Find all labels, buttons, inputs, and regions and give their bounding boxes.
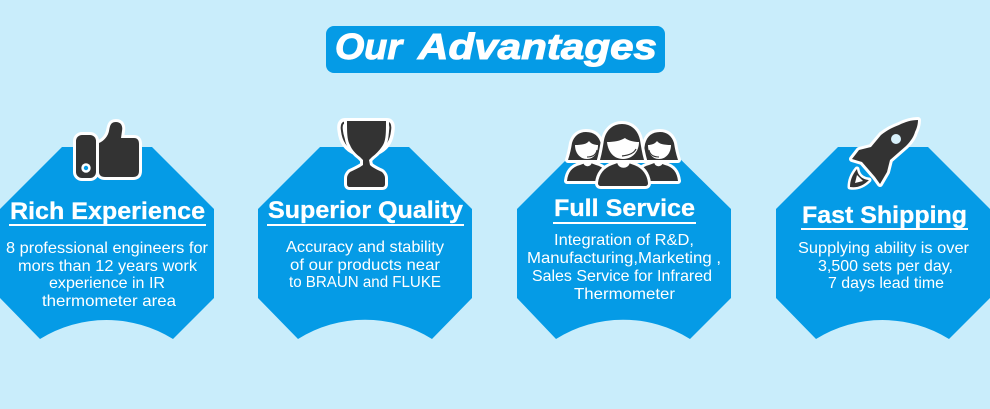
description: 3,500 sets per day, [818,258,953,275]
description: of our products near [290,257,441,274]
description: to BRAUN and FLUKE [289,274,441,291]
description: Accuracy and stability [286,239,444,256]
title: Advantages [417,26,657,67]
panel background [517,147,731,339]
description: thermometer area [42,293,176,310]
description: Sales Service for Infrared [532,268,712,285]
description: mors than 12 years work [18,258,198,275]
icon: support team [567,124,678,186]
panel background [258,147,472,339]
description: Supplying ability is over [798,240,970,257]
icon: rocket [850,120,918,187]
description: Manufacturing,Marketing , [527,250,721,267]
heading: Fast Shipping [802,202,967,229]
description: experience in IR [49,275,165,292]
description: Integration of R&D, [554,232,694,249]
description: Thermometer [574,286,676,303]
panel background [776,147,990,339]
title: Our [335,26,404,67]
heading: Superior Quality [268,197,463,224]
icon: thumbs up [76,122,139,178]
left agent [567,132,609,181]
description [527,232,721,303]
description: 7 days lead time [828,275,944,292]
panel: fast shipping [776,120,990,339]
panel: rich experience [0,122,214,339]
panel background [0,147,214,339]
description [798,240,970,292]
description [286,239,444,291]
panel: full service [517,124,731,339]
heading: Rich Experience [10,198,205,225]
description [6,240,209,310]
panel: superior quality [258,121,472,339]
right agent [636,132,678,181]
center agent [598,124,648,186]
description: 8 professional engineers for [6,240,209,257]
icon: trophy [341,121,391,187]
title [326,26,665,73]
heading: Full Service [554,195,695,222]
